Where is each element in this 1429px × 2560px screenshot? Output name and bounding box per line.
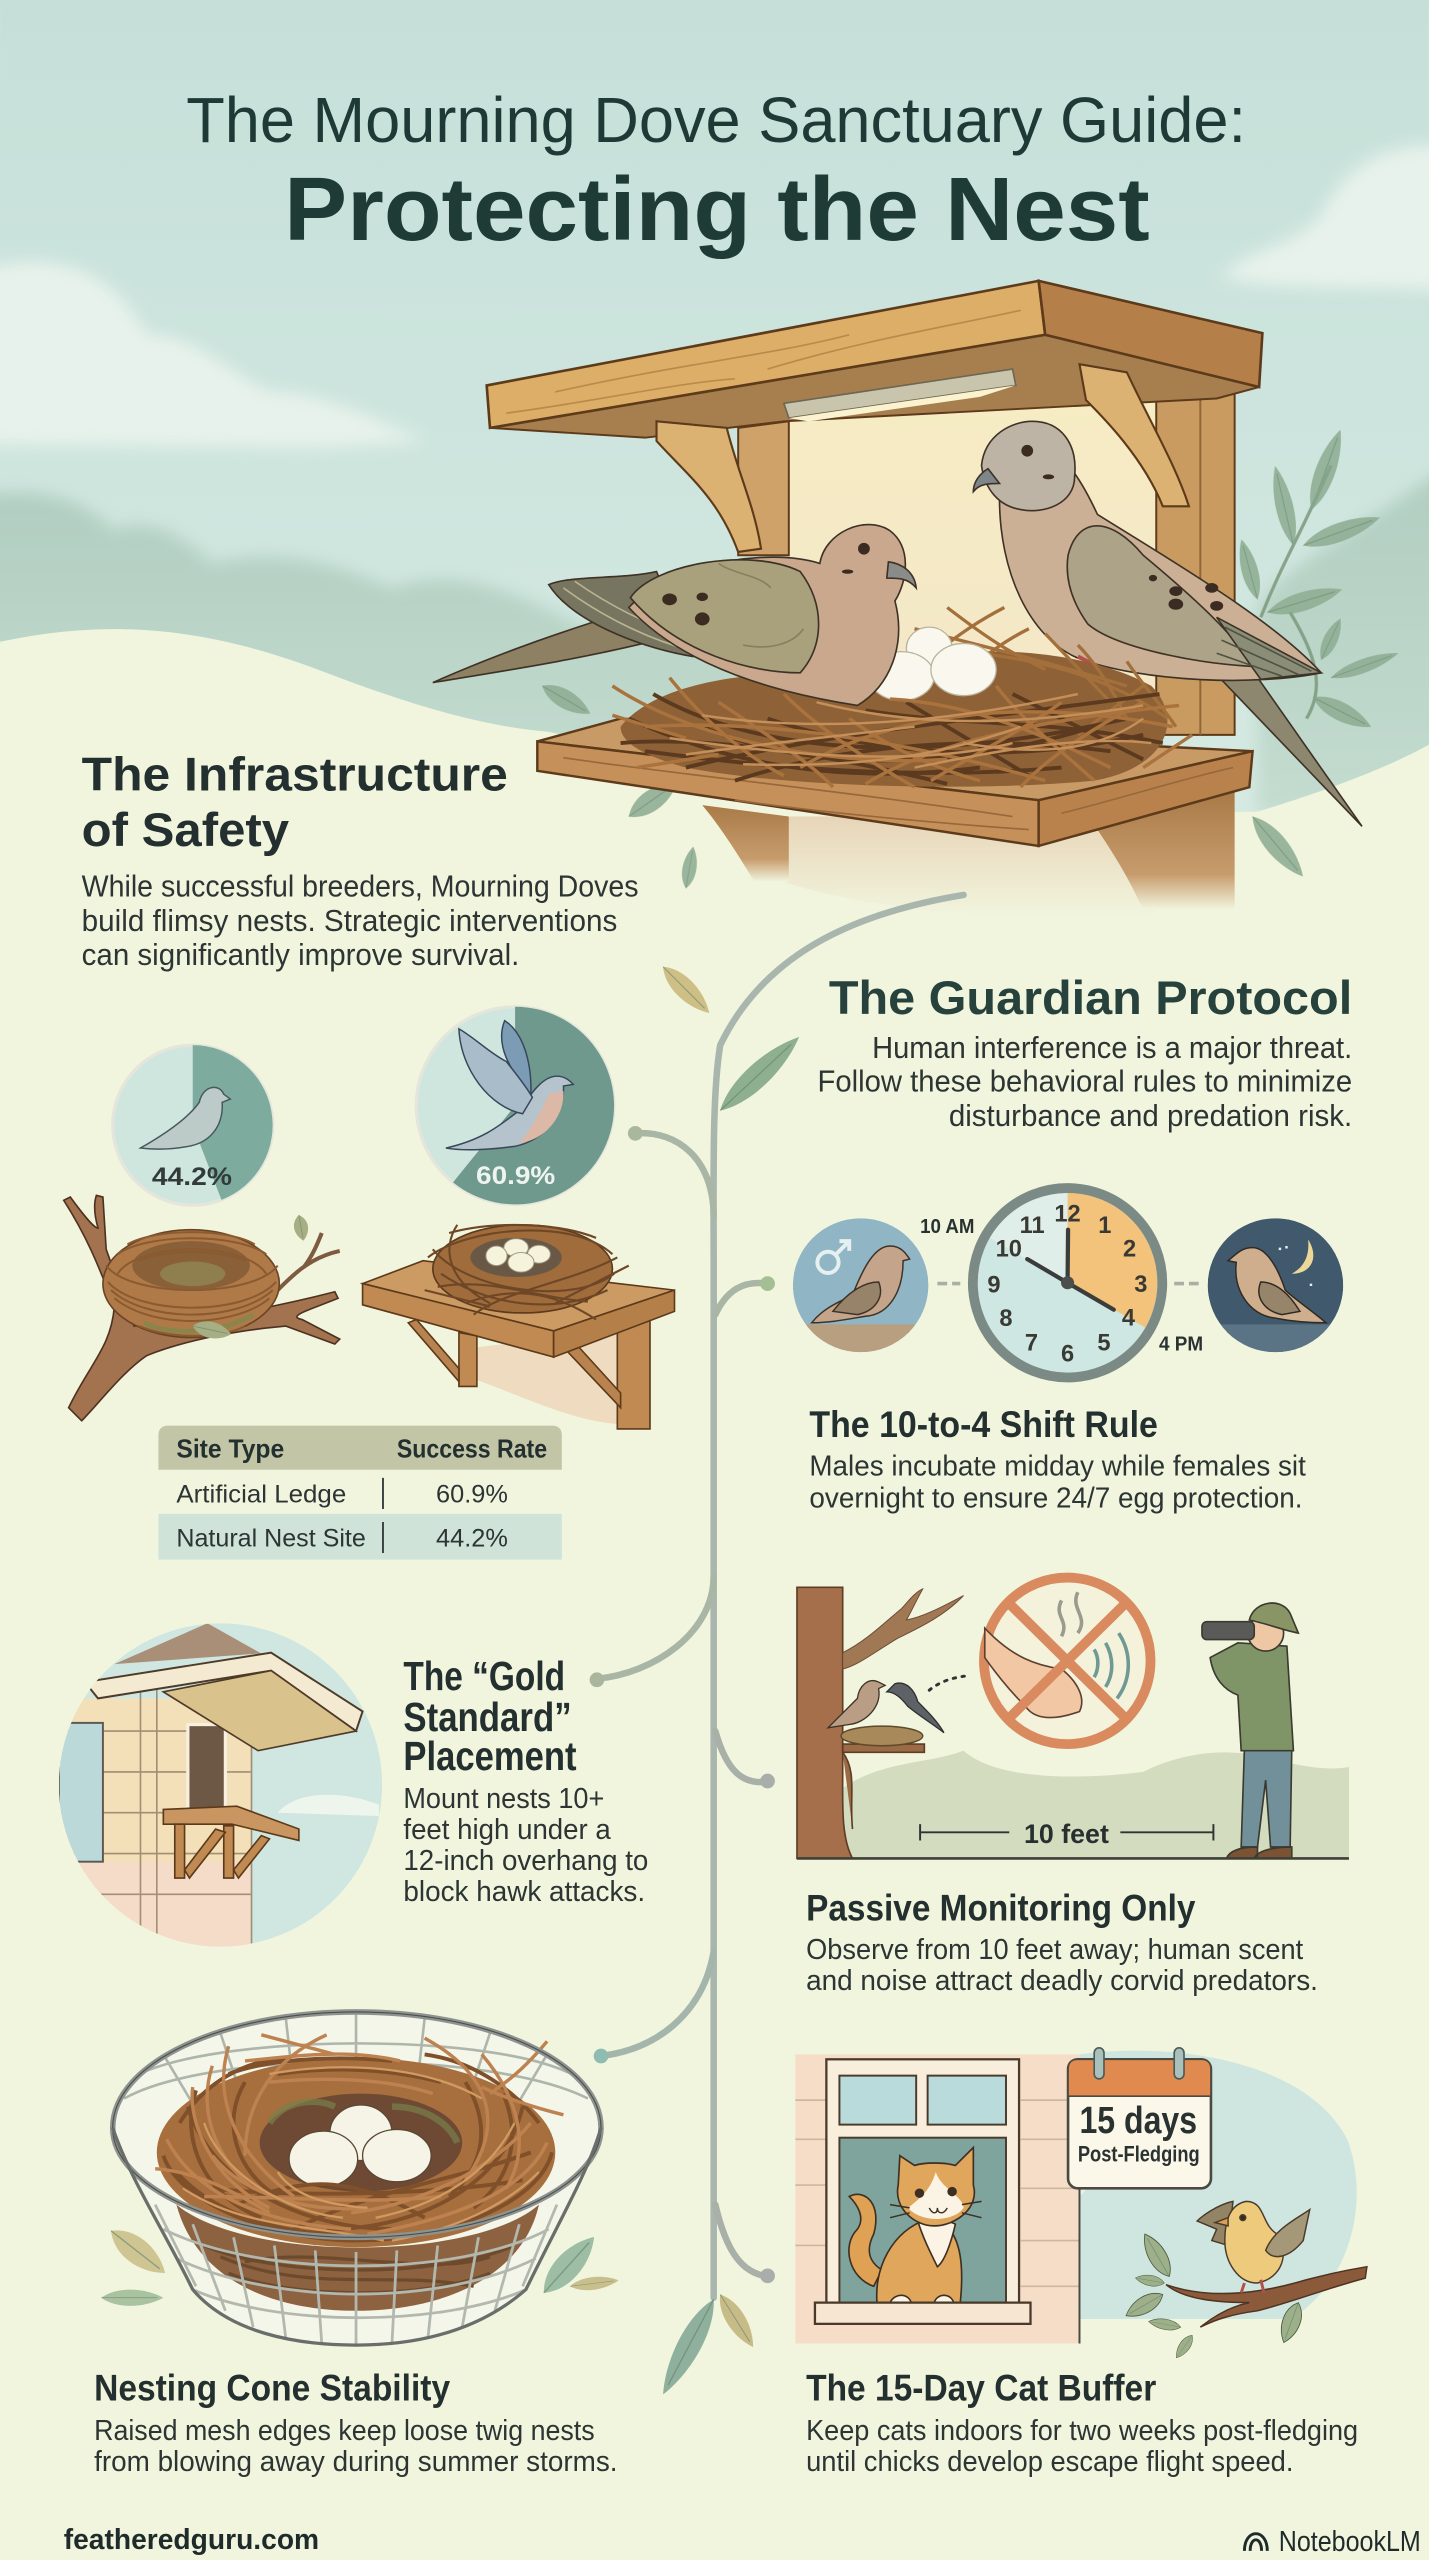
hand: [985, 1628, 1082, 1718]
calendar text: 15 days: [1079, 2099, 1197, 2141]
doorway niche: [188, 1725, 225, 1814]
roof grain: [506, 310, 1021, 413]
basket base and sides: [113, 2128, 601, 2345]
distant green hills: [0, 457, 1429, 817]
moss in nest: [269, 2102, 457, 2143]
title: The Mourning Dove Sanctuary Guide:: [186, 85, 1246, 156]
ground: [1220, 1324, 1330, 1352]
nest back: [621, 651, 1167, 787]
zebra row: [158, 1514, 562, 1560]
eggs: [289, 2105, 431, 2187]
foliage behind ledge: [538, 426, 1401, 890]
platform: [843, 1744, 924, 1829]
icon: notebook arcs: [1244, 2534, 1267, 2551]
rim outline: [113, 2012, 601, 2237]
right post: [1156, 376, 1235, 735]
text: nesting cone stability: Raised mesh edges keep loose twig nests: [94, 2415, 595, 2447]
illustration: artificial ledge nest: [363, 1225, 674, 1429]
ceiling light: [784, 369, 1016, 421]
distance marker: 10 feet: [1024, 1819, 1109, 1849]
roof top: [114, 1624, 262, 1664]
right twig: [278, 1233, 340, 1290]
eggs: [869, 627, 996, 701]
text: nesting cone stability: Nesting Cone Stability: [94, 2368, 451, 2409]
calendar subtext: Post-Fledging: [1078, 2142, 1200, 2167]
vine nodes: [590, 1126, 775, 2283]
shelf: [537, 719, 1253, 846]
intro text: guardian: disturbance and predation risk.: [949, 1100, 1352, 1133]
text: gold standard: feet high under a: [403, 1814, 611, 1846]
vine leaves: [653, 960, 807, 2400]
lower pane: [839, 2138, 1006, 2303]
pie: natural site 44.2%: [113, 1045, 273, 1205]
branch to gold standard: [596, 1576, 714, 1679]
intro text: infrastructure: can significantly improve survival.: [82, 939, 519, 972]
footer source: featheredguru.com: [64, 2524, 319, 2556]
clock labels: [920, 1216, 1203, 1356]
cat muzzle: [908, 2172, 964, 2219]
wall shadow: [477, 1331, 617, 1424]
clock numbers: 11: [1020, 1213, 1045, 1239]
heading: The Guardian Protocol: The Guardian Protocol: [829, 972, 1352, 1025]
clock: [973, 1188, 1162, 1377]
moon: [1292, 1239, 1313, 1274]
branch to shift rule: [715, 1283, 768, 1315]
siding wall: [59, 1698, 252, 1960]
leaves: [191, 1214, 310, 1342]
text: cat buffer: [806, 2368, 1358, 2478]
nest: [433, 1225, 612, 1313]
pie: artificial ledge 60.9%: [416, 1007, 614, 1204]
clock numbers: 12: [1054, 1202, 1081, 1228]
moss: [144, 1315, 253, 1331]
header labels: [176, 1434, 547, 1464]
title: Protecting the Nest: [284, 160, 1150, 260]
roof underside: [490, 335, 1259, 438]
calendar header: [1068, 2059, 1211, 2096]
basket interior: [113, 2012, 601, 2345]
cream hillside background: [0, 629, 1429, 2560]
icon: female dove night: [1208, 1218, 1347, 1357]
branch to cat buffer: [715, 2205, 768, 2276]
binoculars: [1202, 1622, 1254, 1640]
left dove: [433, 525, 916, 705]
sector: 10 to 12: [990, 1193, 1068, 1283]
dotted approach line: [929, 1676, 970, 1690]
braces: [408, 1320, 621, 1408]
value label: 44.2%: [152, 1163, 232, 1191]
ground: [806, 1324, 916, 1352]
text: 10-to-4 shift rule: [809, 1404, 1306, 1514]
text: passive monitoring: Observe from 10 feet away; human scent: [806, 1934, 1303, 1966]
branch: [843, 1589, 964, 1669]
intro text: infrastructure: [82, 871, 639, 972]
twigs back: [915, 608, 1176, 735]
icon: perched dove: [140, 1087, 230, 1149]
cat: [849, 2147, 982, 2303]
column separators: [382, 1478, 384, 1553]
eyes and whiskers: [890, 2188, 982, 2218]
intro text: guardian: Follow these behavioral rules to minimize: [818, 1066, 1352, 1099]
clock numbers: 2: [1123, 1237, 1136, 1263]
nest hollow: [260, 2094, 462, 2192]
house wall: [795, 2054, 1079, 2343]
distance marker: [920, 1819, 1213, 1849]
clock numbers: 7: [1025, 1331, 1038, 1357]
nest body: [103, 1230, 279, 1337]
nest cup: [132, 1241, 250, 1290]
heading: The Infrastructure of Safety: [82, 748, 508, 857]
window frame: [826, 2059, 1019, 2304]
right post: [617, 1311, 650, 1429]
branch: [64, 1195, 340, 1421]
faded wall under ledge: [784, 817, 1156, 917]
cloud: [278, 1795, 379, 1816]
illustration: passive monitoring: [797, 1578, 1349, 1858]
text: cat buffer: The 15-Day Cat Buffer: [806, 2368, 1156, 2409]
heading: The Infrastructure of Safety: of Safety: [82, 804, 290, 857]
intro text: infrastructure: While successful breeders, Mourning Doves: [82, 871, 639, 904]
roof side face: [1039, 281, 1262, 387]
table rows: Natural Nest Site: [176, 1525, 366, 1553]
text: passive monitoring: Passive Monitoring Only: [806, 1887, 1196, 1928]
eave board: [85, 1653, 363, 1731]
clock numbers: 8: [999, 1306, 1013, 1332]
text: gold standard: Placement: [403, 1733, 577, 1779]
clock hands: [1027, 1230, 1114, 1310]
icon: flying dove: [446, 1021, 573, 1150]
illustration: nesting cone: [101, 2012, 619, 2345]
eggs: [486, 1239, 550, 1272]
table side: [554, 1290, 674, 1357]
bushes: [843, 1751, 1349, 1858]
branch leaves: [1122, 2230, 1307, 2361]
left bracket: [657, 421, 761, 552]
heading: The Infrastructure of Safety: The Infrastructure: [82, 748, 508, 801]
soffit: [163, 1671, 356, 1751]
sky background: [0, 0, 1429, 1013]
text: cat buffer: until chicks develop escape flight speed.: [806, 2446, 1293, 2478]
wall seams: [59, 1682, 252, 1943]
tree trunk: [797, 1587, 852, 1858]
sound arcs: [1094, 1633, 1128, 1698]
small dove: [828, 1681, 885, 1728]
text: gold standard: Standard”: [403, 1694, 572, 1740]
cross: [1009, 1604, 1125, 1718]
nest cup floor: [160, 1262, 225, 1286]
lower right brace: [1094, 792, 1235, 910]
value label: 60.9%: [476, 1162, 555, 1190]
cat paws: [890, 2295, 954, 2303]
side leaves: [101, 2221, 619, 2306]
crow: [887, 1683, 944, 1733]
intro text: infrastructure: build flimsy nests. Strategic interventions: [82, 905, 617, 938]
clock numbers: 9: [987, 1272, 1001, 1298]
basket rim: [113, 2012, 601, 2237]
sky circle: [59, 1623, 382, 1947]
woven rings: [106, 1232, 278, 1336]
wall boards: [795, 2100, 1079, 2286]
legs: [459, 1333, 477, 1386]
header row: [158, 1426, 562, 1470]
right bracket: [1079, 364, 1189, 506]
clock labels: 4 PM: [1159, 1334, 1203, 1356]
cat body: [877, 2218, 962, 2303]
text: nesting cone stability: from blowing away during summer storms.: [94, 2446, 617, 2478]
perch branch: [1166, 2267, 1367, 2327]
text: cat buffer: Keep cats indoors for two weeks post-fledging: [806, 2415, 1358, 2447]
prohibition sign: [984, 1578, 1151, 1744]
text: 10-to-4 shift rule: The 10-to-4 Shift Rule: [809, 1404, 1158, 1445]
clock numbers: 1: [1098, 1213, 1111, 1239]
branch to nest success: [635, 1133, 714, 1217]
text: passive monitoring: and noise attract deadly corvid predators.: [806, 1965, 1318, 1997]
hero nest front twigs: [612, 678, 1192, 787]
hat: [1249, 1603, 1298, 1633]
nest main: [157, 2058, 555, 2247]
intro text: guardian: [818, 1032, 1352, 1133]
hero illustration: wooden nesting ledge with doves: [433, 281, 1401, 917]
left post: [738, 421, 789, 555]
side window: [59, 1723, 103, 1862]
observer: [1202, 1603, 1298, 1858]
text: gold standard: [403, 1653, 648, 1908]
text: gold standard: The “Gold: [403, 1653, 565, 1699]
text: passive monitoring: [806, 1887, 1318, 1997]
nest lower body: [176, 2205, 539, 2311]
header labels: Success Rate: [397, 1434, 547, 1464]
data table: [158, 1426, 562, 1560]
shelf grain: [563, 758, 1233, 830]
cat chest: [918, 2220, 955, 2267]
dove: [1228, 1248, 1326, 1323]
lit back wall: [789, 379, 1156, 735]
lower blob edge: [1079, 2123, 1143, 2196]
top panes: [839, 2076, 1006, 2125]
text: nesting cone stability: [94, 2368, 617, 2478]
vine connector: [596, 895, 964, 2298]
dove: [812, 1246, 910, 1323]
ground line: [797, 1857, 1349, 1859]
text: gold standard: Mount nests 10+: [403, 1783, 604, 1815]
table rows: [176, 1480, 508, 1553]
illustration: natural nest on branch: [64, 1195, 340, 1421]
text: gold standard: 12-inch overhang to: [403, 1845, 648, 1877]
sector: 12 to 4: [1068, 1193, 1157, 1328]
calendar rings: [1094, 2048, 1184, 2079]
table rows: Artificial Ledge: [176, 1480, 346, 1508]
nest lower weave: [204, 2245, 514, 2293]
nest twigs: [425, 1225, 629, 1320]
tabletop: [363, 1261, 674, 1331]
fledgling chick: [1197, 2201, 1310, 2293]
text: 10-to-4 shift rule: overnight to ensure 24/7 egg protection.: [809, 1482, 1303, 1514]
table front: [363, 1284, 554, 1357]
tail: [849, 2194, 882, 2286]
dashes: [937, 1282, 1200, 1285]
scent wisps: [1059, 1592, 1082, 1636]
small nest: [841, 1726, 923, 1746]
branch to passive monitoring: [715, 1731, 768, 1782]
right dove: [973, 421, 1362, 826]
shoes: [1226, 1847, 1292, 1858]
table rows: 60.9%: [436, 1480, 508, 1508]
text: gold standard: block hawk attacks.: [403, 1876, 645, 1908]
clock numbers: 5: [1097, 1331, 1111, 1357]
male symbol: [817, 1241, 849, 1273]
calendar: [1068, 2048, 1211, 2188]
nest hollow: [470, 1238, 562, 1277]
roof front face: [487, 281, 1045, 428]
clock numbers: 4: [1122, 1306, 1136, 1332]
clock hub: [1061, 1276, 1074, 1289]
torso: [1210, 1643, 1293, 1751]
clock numbers: [987, 1202, 1147, 1367]
clouds: [0, 145, 1429, 447]
lower left brace: [702, 805, 789, 882]
clock numbers: 3: [1134, 1272, 1147, 1298]
clock numbers: 10: [996, 1237, 1022, 1263]
icon: male dove daytime: [792, 1218, 931, 1357]
lower wall tint: [79, 1862, 252, 1946]
branch to nesting cone: [601, 1952, 714, 2056]
wall edge: [1078, 2188, 1080, 2343]
twigs: [155, 2035, 563, 2241]
back mesh: [124, 2014, 588, 2123]
stars: [1279, 1246, 1312, 1286]
clock labels: 10 AM: [920, 1216, 974, 1238]
table rows: 44.2%: [436, 1525, 508, 1553]
post seam: [1199, 379, 1201, 735]
window sill: [815, 2303, 1030, 2324]
mini ledge: [163, 1806, 299, 1878]
legs: [1241, 1747, 1292, 1847]
title: [186, 85, 1246, 260]
cat head: [898, 2147, 974, 2226]
face: [1248, 1615, 1284, 1651]
clock numbers: 6: [1061, 1341, 1074, 1367]
intro text: guardian: Human interference is a major threat.: [872, 1032, 1352, 1065]
illustration: cat buffer: [795, 2048, 1367, 2361]
sky blob: [1079, 2051, 1357, 2319]
text: 10-to-4 shift rule: Males incubate midday while females sit: [809, 1451, 1306, 1483]
header labels: Site Type: [176, 1434, 284, 1464]
illustration: gold standard placement: [59, 1623, 382, 1960]
front mesh: [155, 2205, 557, 2345]
